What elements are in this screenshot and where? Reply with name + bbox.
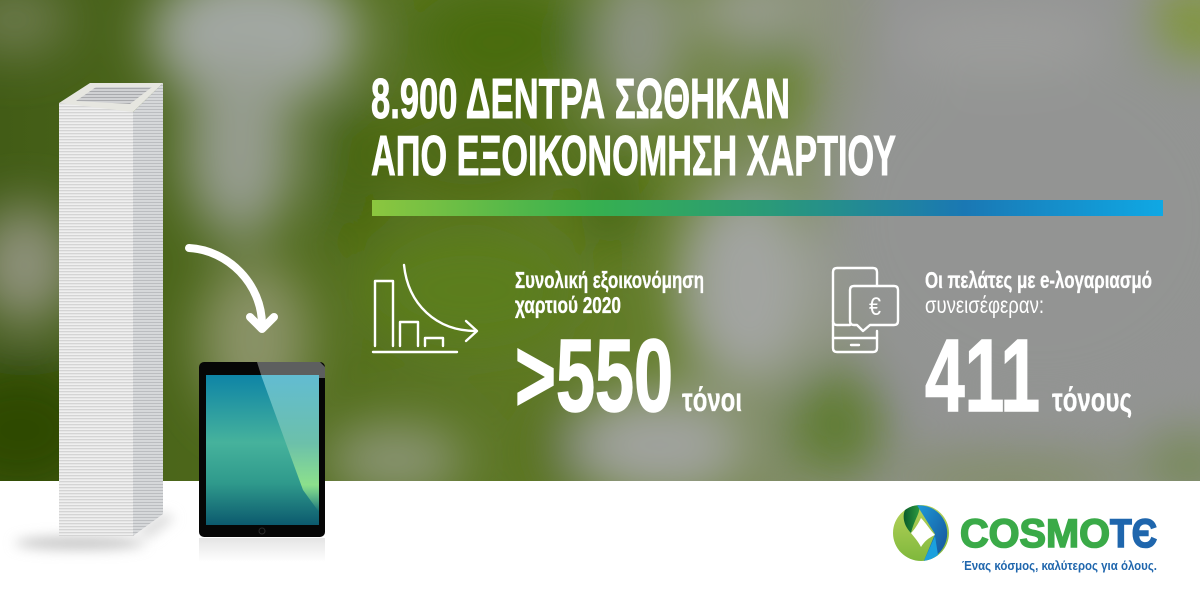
title — [371, 67, 896, 188]
stat: total paper savings: >550 — [515, 318, 673, 433]
icon: phone with euro bill bubble — [833, 268, 898, 352]
icon: phone with euro bill bubble: € — [869, 293, 881, 321]
white floor band — [0, 481, 1200, 610]
tablet illustration — [199, 362, 325, 562]
stat: e-bill customers contribution: τόνους — [1052, 381, 1132, 418]
stat: total paper savings: τόνοι — [682, 381, 742, 418]
icon: declining bar chart with curve arrow — [373, 265, 477, 352]
stat: total paper savings: χαρτιού 2020 — [515, 292, 621, 318]
stat: total paper savings: Συνολική εξοικονόμηση — [515, 267, 704, 293]
curved arrow from paper to tablet — [189, 248, 274, 329]
title: 8.900 ΔΕΝΤΡΑ ΣΩΘΗΚΑΝ — [371, 67, 790, 131]
COSMOTE logo: COSMO — [960, 512, 1110, 556]
stat: e-bill customers contribution: 411 — [925, 318, 1040, 433]
paper stack illustration — [15, 83, 175, 550]
logo mark — [893, 505, 949, 561]
COSMOTE logo — [893, 505, 1157, 573]
stat: total paper savings — [515, 267, 742, 433]
gradient divider bar — [372, 200, 1163, 216]
stat: e-bill customers contribution — [925, 267, 1152, 433]
stat: e-bill customers contribution: συνεισέφεραν: — [925, 292, 1044, 318]
COSMOTE logo: TЄ — [1110, 512, 1157, 556]
COSMOTE logo: Ένας κόσμος, καλύτερος για όλους. — [962, 558, 1157, 573]
